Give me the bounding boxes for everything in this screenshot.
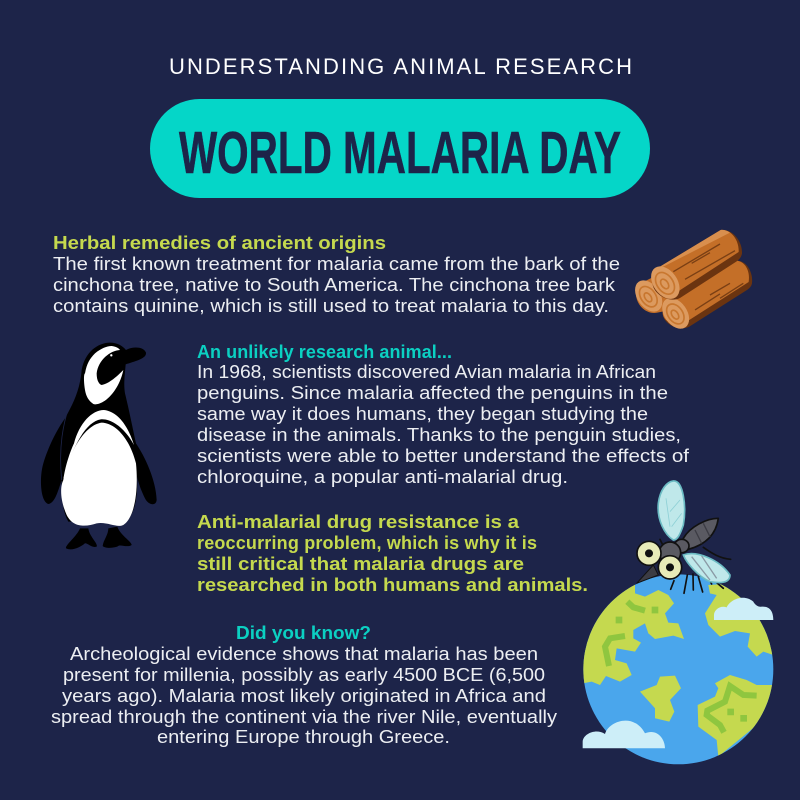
text block: herbal remedies: Herbal remedies of ancient origins bbox=[53, 233, 386, 253]
penguin belly bbox=[61, 423, 137, 526]
text block: herbal remedies bbox=[53, 233, 620, 316]
subtitle: UNDERSTANDING ANIMAL RESEARCH bbox=[169, 54, 632, 79]
text block: did you know bbox=[51, 623, 557, 747]
top log bbox=[652, 230, 742, 300]
text block: herbal remedies: contains quinine, which is still used to treat malaria to this day. bbox=[53, 296, 609, 316]
text block: herbal remedies: The first known treatment for malaria came from the bark of the bbox=[53, 254, 620, 274]
text block: did you know: Did you know? bbox=[236, 623, 371, 643]
text block: unlikely research animal: scientists were able to better understand the effects of bbox=[197, 446, 690, 466]
penguin face patch bbox=[84, 346, 123, 404]
icon: globe with mosquito bbox=[582, 480, 774, 764]
callout: drug resistance: Anti-malarial drug resistance is a bbox=[197, 512, 520, 532]
bottom log bbox=[663, 261, 752, 328]
penguin body bbox=[41, 343, 157, 522]
text block: did you know: Archeological evidence shows that malaria has been bbox=[70, 644, 538, 664]
cloud lower bbox=[583, 721, 665, 748]
text block: unlikely research animal: chloroquine, a popular anti-malarial drug. bbox=[197, 467, 568, 487]
callout: drug resistance: researched in both humans and animals. bbox=[197, 575, 588, 595]
callout: drug resistance: reoccurring problem, which is why it is bbox=[197, 533, 537, 553]
text block: did you know: present for millenia, possibly as early 4500 BCE (6,500 bbox=[63, 665, 545, 685]
text block: unlikely research animal: penguins. Since malaria affected the penguins in the bbox=[197, 383, 668, 403]
text block: did you know: years ago). Malaria most likely originated in Africa and bbox=[62, 686, 546, 706]
text block: unlikely research animal: In 1968, scientists discovered Avian malaria in African bbox=[197, 362, 656, 382]
text block: unlikely research animal: disease in the animals. Thanks to the penguin studies, bbox=[197, 425, 681, 445]
back log bbox=[636, 262, 695, 313]
text block: did you know: entering Europe through Greece. bbox=[157, 727, 450, 747]
text block: unlikely research animal bbox=[197, 342, 690, 487]
callout: drug resistance: still critical that malaria drugs are bbox=[197, 554, 524, 574]
mosquito bbox=[637, 481, 731, 593]
icon: penguin bbox=[41, 343, 157, 549]
callout: drug resistance bbox=[197, 512, 588, 595]
penguin chest band bbox=[63, 410, 134, 480]
globe bbox=[583, 574, 774, 764]
penguin feet bbox=[66, 527, 132, 549]
text block: unlikely research animal: same way it does humans, they began studying the bbox=[197, 404, 648, 424]
title pill bbox=[150, 99, 650, 198]
text block: unlikely research animal: An unlikely research animal... bbox=[197, 342, 452, 362]
text block: did you know: spread through the continent via the river Nile, eventually bbox=[51, 707, 557, 727]
icon: logs bbox=[629, 230, 752, 334]
text block: herbal remedies: cinchona tree, native to South America. The cinchona tree bark bbox=[53, 275, 616, 295]
cloud upper bbox=[714, 598, 773, 620]
